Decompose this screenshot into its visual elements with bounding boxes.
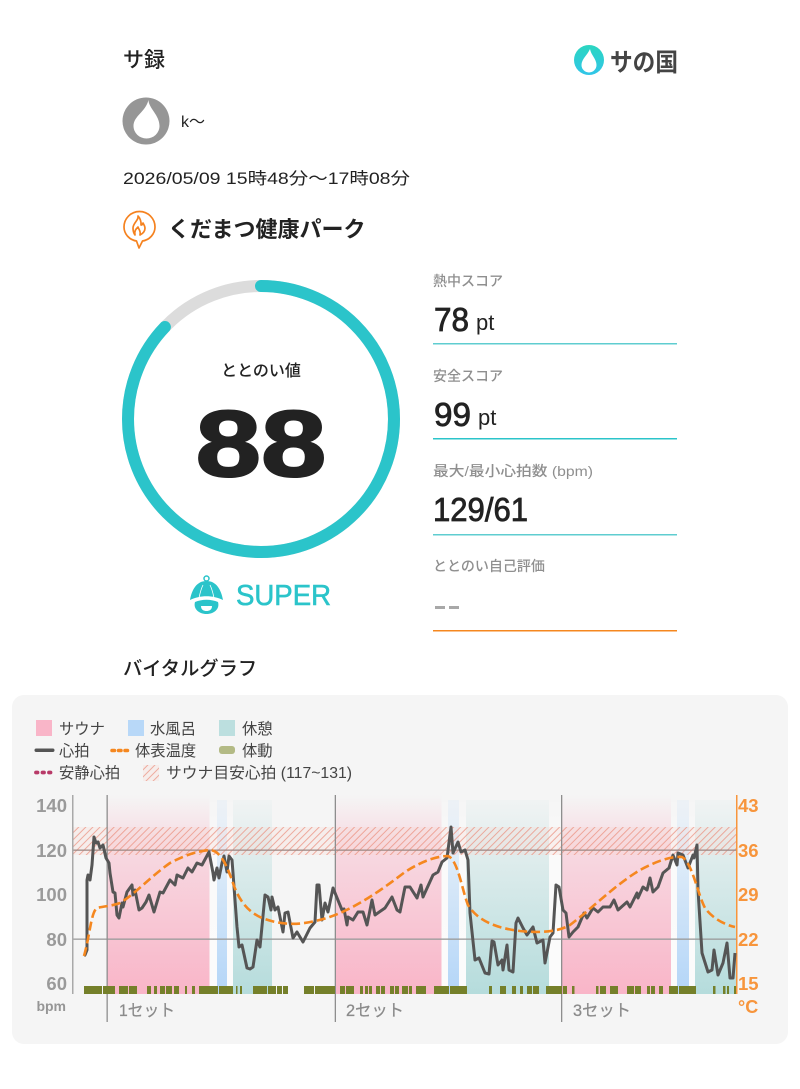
stat: ととのい自己評価: ととのい自己評価: [433, 558, 545, 574]
body movement bars: [84, 986, 736, 994]
legend: サウナ: [59, 721, 105, 738]
heart rate line: [84, 827, 735, 978]
heading: サ録: サ録: [123, 49, 165, 72]
right axis labels: 22: [738, 929, 759, 950]
legend: 体表温度: [135, 743, 196, 760]
session date: 2026/05/09 15時48分〜17時08分: [123, 169, 411, 188]
facility name: くだまつ健康パーク: [168, 217, 366, 242]
stat: 最大/最小心拍数: [433, 463, 677, 536]
left axis labels: 120: [36, 840, 67, 861]
user avatar: [122, 98, 170, 144]
gauge number: 88: [196, 391, 326, 496]
stat: 熱中スコア: 78: [434, 301, 469, 338]
logo: サの国: サの国: [610, 49, 678, 77]
icon: facility flame pin: [124, 211, 155, 248]
left axis labels: 80: [46, 929, 67, 950]
set labels: 2セット: [346, 1002, 404, 1020]
stat: 熱中スコア: [433, 273, 677, 344]
sauna, water bath and rest zones: [107, 795, 736, 994]
left axis labels: [36, 795, 67, 1014]
gridlines: [72, 795, 738, 1022]
set labels: 1セット: [119, 1002, 175, 1020]
body surface temperature line: [84, 850, 735, 956]
stat: 安全スコア: pt: [478, 405, 496, 430]
icon: sauna hat: [190, 576, 223, 614]
stat: 最大/最小心拍数: 最大/最小心拍数 (bpm): [433, 463, 593, 479]
right axis labels: [738, 795, 759, 1017]
right axis labels: 29: [738, 884, 759, 905]
target heart rate band: [73, 827, 736, 855]
heading: バイタルグラフ: バイタルグラフ: [123, 658, 257, 680]
stat: ととのい自己評価: [433, 558, 677, 632]
stat: 安全スコア: 99: [434, 396, 471, 433]
right axis labels: 15: [738, 973, 759, 994]
stat: 熱中スコア: 熱中スコア: [433, 273, 503, 289]
gauge label: ととのい値: [221, 362, 301, 380]
gauge track: [128, 286, 394, 552]
rank label: SUPER: [236, 580, 331, 612]
legend: 心拍: [59, 743, 90, 760]
legend: サウナ目安心拍 (117~131): [166, 765, 352, 782]
panel: vital graph: [12, 695, 788, 1044]
chart: vitals: [72, 795, 738, 1022]
set labels: 3セット: [573, 1002, 631, 1020]
legend: 休憩: [242, 721, 273, 738]
logo: サの国: [574, 45, 678, 77]
stat: 最大/最小心拍数: 129/61: [433, 491, 528, 528]
right axis labels: 36: [738, 840, 759, 861]
left axis labels: 60: [46, 973, 67, 994]
gauge: ととのい値: [128, 286, 394, 552]
right axis labels: °C: [738, 997, 758, 1017]
legend: 体動: [242, 743, 273, 760]
right axis labels: 43: [738, 795, 759, 816]
left axis labels: 100: [36, 884, 67, 905]
stat: 安全スコア: [433, 368, 677, 440]
left axis labels: 140: [36, 795, 67, 816]
stat: 熱中スコア: pt: [476, 310, 494, 335]
left axis labels: bpm: [36, 998, 66, 1014]
stat: 安全スコア: 安全スコア: [433, 368, 503, 384]
legend: 安静心拍: [59, 765, 120, 782]
set labels: [119, 1002, 631, 1020]
user name: k〜: [181, 114, 205, 131]
legend: [34, 720, 352, 782]
gauge value arc: [128, 286, 394, 552]
legend: 水風呂: [150, 721, 196, 738]
icon: logo drop: [574, 45, 604, 75]
